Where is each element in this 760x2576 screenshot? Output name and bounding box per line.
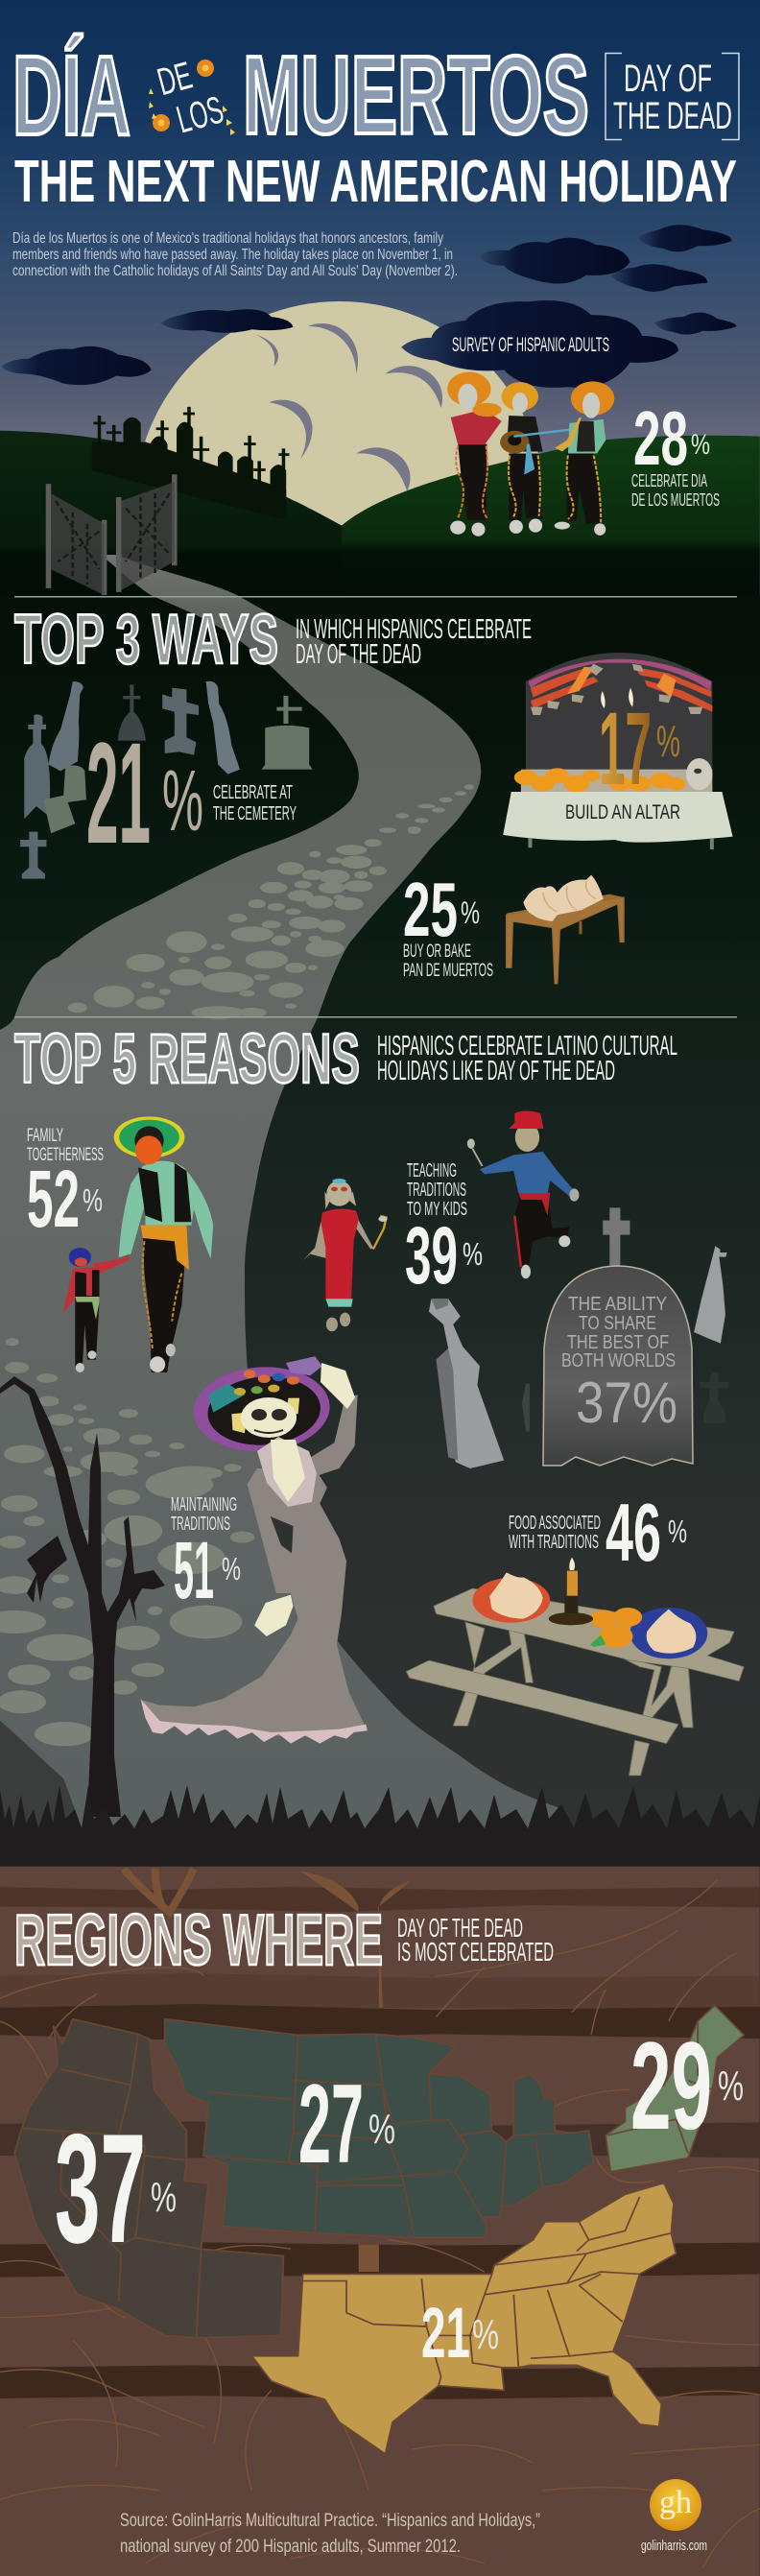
ground left of lower road [0,1721,96,1867]
intro paragraph: members and friends who have passed away. The holiday takes place on November 1, in [12,247,453,263]
stat: midwest 27 percent: 27 [298,2061,364,2186]
heading: top 3 ways: DAY OF THE DEAD [296,639,421,670]
stat: 52 percent family togetherness: % [83,1182,103,1218]
bracketed subtitle: day of the dead: DAY OF [624,58,712,100]
northeast region [606,2005,744,2172]
source note: Source: GolinHarris Multicultural Practice. “Hispanics and Holidays,” [120,2511,540,2531]
stat: 51 percent maintaining traditions: MAINTAINING [171,1494,237,1515]
stat: 39 percent teaching traditions: TO MY KIDS [407,1199,467,1220]
tombstone with 37 percent: BOTH WORLDS [561,1350,676,1371]
skull [241,1397,297,1438]
roots [0,1869,760,2567]
moon with craters [134,301,545,712]
west region [14,2019,283,2338]
three mariachi skeletons [447,371,614,537]
stat: 17 percent build an altar: % [656,716,680,766]
source note: national survey of 200 Hispanic adults, Summer 2012. [120,2537,461,2557]
stat: west 37 percent: 37 [55,2102,146,2276]
stat: 39 percent teaching traditions: 39 [405,1210,458,1300]
survey cloud label: SURVEY OF HISPANIC ADULTS [452,334,609,356]
south region [252,2183,676,2454]
musician 3 [555,381,614,536]
stat: 39 percent teaching traditions [405,1160,483,1300]
figure: dancer with red hat [467,1110,579,1278]
tombstone with 37 percent: 37% [576,1371,677,1435]
tombstone with 37 percent: THE ABILITY [568,1294,667,1315]
stat: 21 percent celebrate at cemetery: THE CEMETERY [213,803,297,824]
tree moss [27,1536,67,1603]
picnic table [406,1558,744,1776]
soil background with strata [0,1867,760,2576]
musician 1 [447,371,502,537]
stat: 28 percent celebrate: 28 [633,395,688,481]
father [114,1116,213,1372]
cobblestones upper road [68,784,474,1019]
midwest region [165,2019,594,2237]
hills [0,431,760,596]
stat: 46 percent food: FOOD ASSOCIATED [509,1513,601,1534]
cemetery silhouettes on the hill [92,407,289,520]
figure: La Catrina [140,1353,368,1744]
heading: regions where: REGIONS WHERE [14,1899,383,1980]
stat: 51 percent maintaining traditions: % [222,1551,241,1586]
hem lace [140,1699,368,1744]
stat: 28 percent celebrate: % [691,429,710,461]
logo: golinharris [641,2479,707,2554]
tombstone with 37 percent: THE BEST OF [567,1332,669,1353]
stat: 52 percent family togetherness: FAMILY [27,1126,63,1146]
stat: 25 percent pan de muertos: BUY OR BAKE [403,942,471,962]
tombstone with 37 percent: TO SHARE [579,1313,656,1334]
stat: 39 percent teaching traditions: % [463,1236,483,1272]
stat: 39 percent teaching traditions: TRADITIONS [407,1180,466,1201]
stat: west 37 percent: % [151,2174,177,2221]
altar [503,653,733,849]
icon: grave markers [20,681,313,879]
icon: marigolds and leaves [149,60,235,135]
hat [175,1353,349,1465]
stat: 17 percent build an altar: 17 [599,690,652,806]
stat: 51 percent maintaining traditions [171,1494,241,1615]
stat: 25 percent pan de muertos: % [461,895,480,930]
heading: regions where: DAY OF THE DEAD [397,1913,523,1943]
stat: 46 percent food: WITH TRADITIONS [509,1532,599,1553]
stat: 52 percent family togetherness: TOGETHERNESS [27,1145,104,1165]
ground background [0,595,760,1867]
bracketed subtitle: day of the dead [606,54,739,140]
intro paragraph: connection with the Catholic holidays of All Saints' Day and All Souls' Day (November 2). [12,263,458,279]
hands [321,1363,355,1409]
heading: top 3 ways: IN WHICH HISPANICS CELEBRATE [296,614,532,645]
torso bones [257,1437,317,1507]
waist notch [271,1516,294,1553]
logo: golinharris: gh [659,2485,692,2520]
stat: 46 percent food: % [668,1514,687,1549]
title: Dia de los Muertos: DÍA [12,33,131,159]
stat: midwest 27 percent: % [368,2106,395,2153]
section divider [14,1016,737,1017]
title word: de: DE [154,55,197,104]
title: Dia de los Muertos [12,33,589,159]
stat: 46 percent food [509,1488,687,1579]
tombstone with 37 percent [543,1266,693,1466]
stat: 17 percent build an altar: BUILD AN ALTAR [565,801,680,823]
section divider [14,596,737,597]
cobblestones lower road [0,1338,254,1746]
musician 2 [500,382,577,534]
intro paragraph [12,230,458,279]
stat: 52 percent family togetherness [27,1126,104,1244]
figures: father and child [63,1116,213,1372]
cemetery gate [48,474,175,595]
dead tree [0,1376,165,1817]
intro paragraph: Día de los Muertos is one of Mexico's traditional holidays that honors ancestors, family [12,230,443,247]
clouds [2,225,737,388]
lower hand [254,1595,294,1636]
stat: 52 percent family togetherness: 52 [27,1154,80,1244]
stat: south 21 percent: 21 [421,2293,470,2373]
stat: 21 percent celebrate at cemetery: % [162,753,203,849]
icon: table with bread [507,875,624,984]
night sky background [0,0,760,596]
logo: golinharris: golinharris.com [641,2538,707,2554]
figure: woman in red dress [303,1179,387,1331]
stat: 17 percent build an altar [565,690,680,823]
heading: top 3 ways: TOP 3 WAYS [14,601,278,679]
gown [143,1468,366,1737]
stat: 25 percent pan de muertos: 25 [403,867,458,952]
stat: 51 percent maintaining traditions: TRADITIONS [171,1514,230,1535]
stat: northeast 29 percent: % [718,2063,744,2110]
raised arm [305,1395,358,1478]
title word: los: LOS [173,88,227,141]
grass silhouette [0,1785,760,1867]
stat: 25 percent pan de muertos: PAN DE MUERTOS [403,961,493,981]
ribs [271,1440,305,1502]
heading: regions where: IS MOST CELEBRATED [397,1937,554,1967]
graveyard stones [429,1207,729,1468]
stat: 46 percent food: 46 [606,1488,661,1579]
source note [120,2511,540,2557]
heading: top 5 reasons: TOP 5 REASONS [14,1020,360,1098]
stat: 39 percent teaching traditions: TEACHING [407,1160,457,1181]
map of the United States [14,2005,744,2454]
stat: 21 percent celebrate at cemetery: CELEBRATE AT [213,782,293,803]
stat: 21 percent celebrate at cemetery: 21 [86,712,151,873]
winding road [0,555,576,1867]
stat: 51 percent maintaining traditions: 51 [174,1525,214,1615]
stat: south 21 percent: % [472,2311,499,2358]
child [63,1248,129,1372]
